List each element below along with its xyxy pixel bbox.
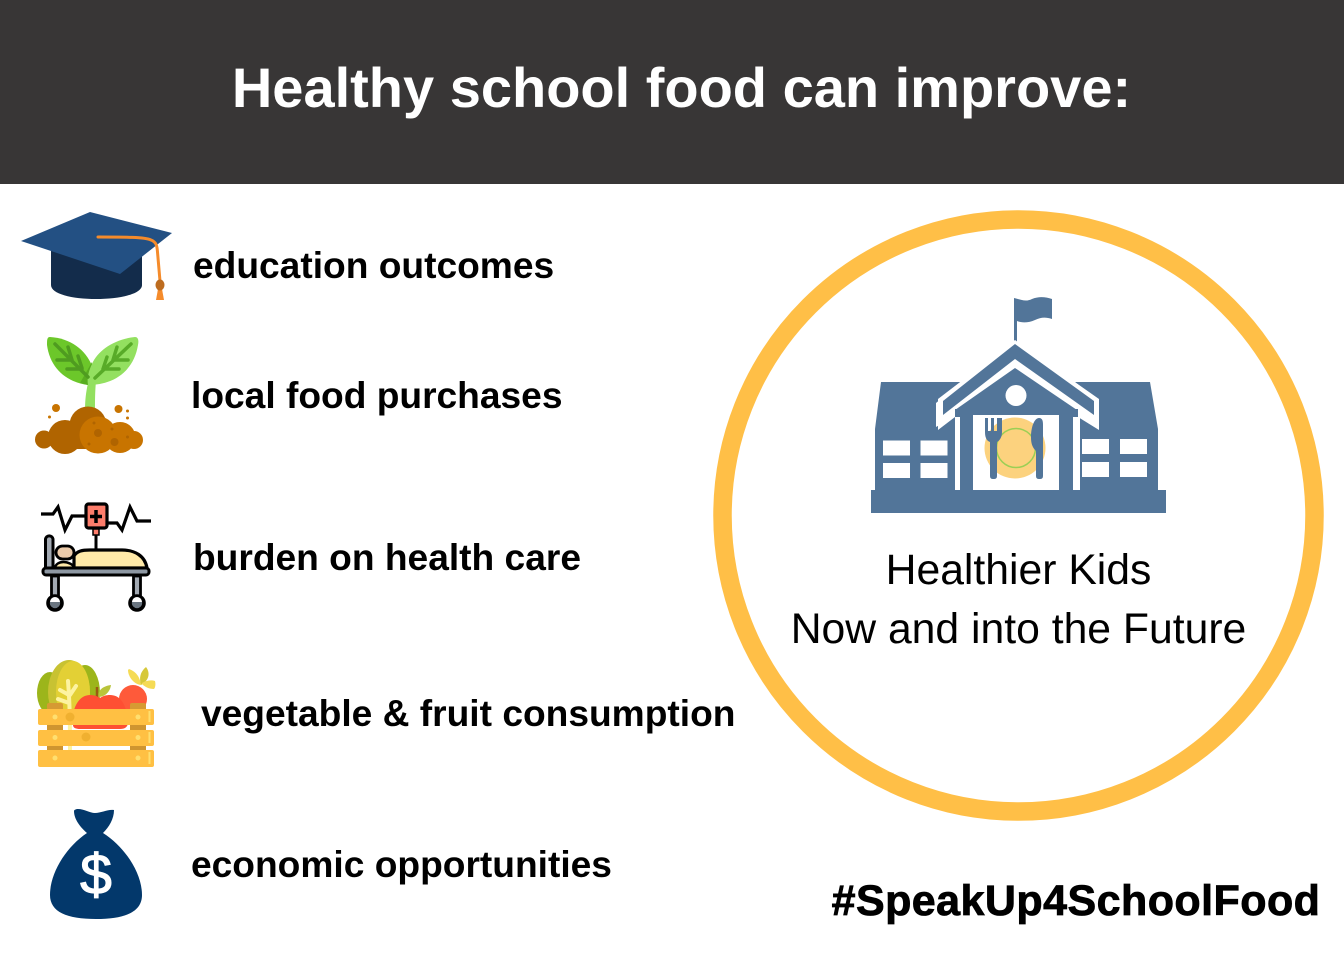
label: local food purchases: local food purchases <box>191 374 562 416</box>
hashtag: #SpeakUp4SchoolFood <box>832 877 1320 925</box>
text: now and into the future: Now and into the Future <box>791 605 1246 653</box>
icon: money bag <box>50 809 142 919</box>
icon: school building with plate <box>871 297 1166 513</box>
text: healthier kids: Healthier Kids <box>886 546 1151 594</box>
label: vegetable and fruit consumption: vegetable & fruit consumption <box>201 692 735 734</box>
header banner <box>0 0 1344 184</box>
icon: seedling in soil <box>35 337 143 454</box>
icon: hospital bed with IV <box>41 504 151 610</box>
label: economic opportunities: economic opportunities <box>191 843 612 885</box>
label: burden on health care: burden on health care <box>193 536 581 578</box>
dollar sign: $ <box>80 843 112 907</box>
title: Healthy school food can improve: <box>232 56 1131 119</box>
label: education outcomes: education outcomes <box>193 244 554 286</box>
icon: graduation cap <box>21 212 172 300</box>
panel: healthier kids circle <box>722 220 1314 812</box>
icon: crate of vegetables and fruit <box>37 660 155 767</box>
